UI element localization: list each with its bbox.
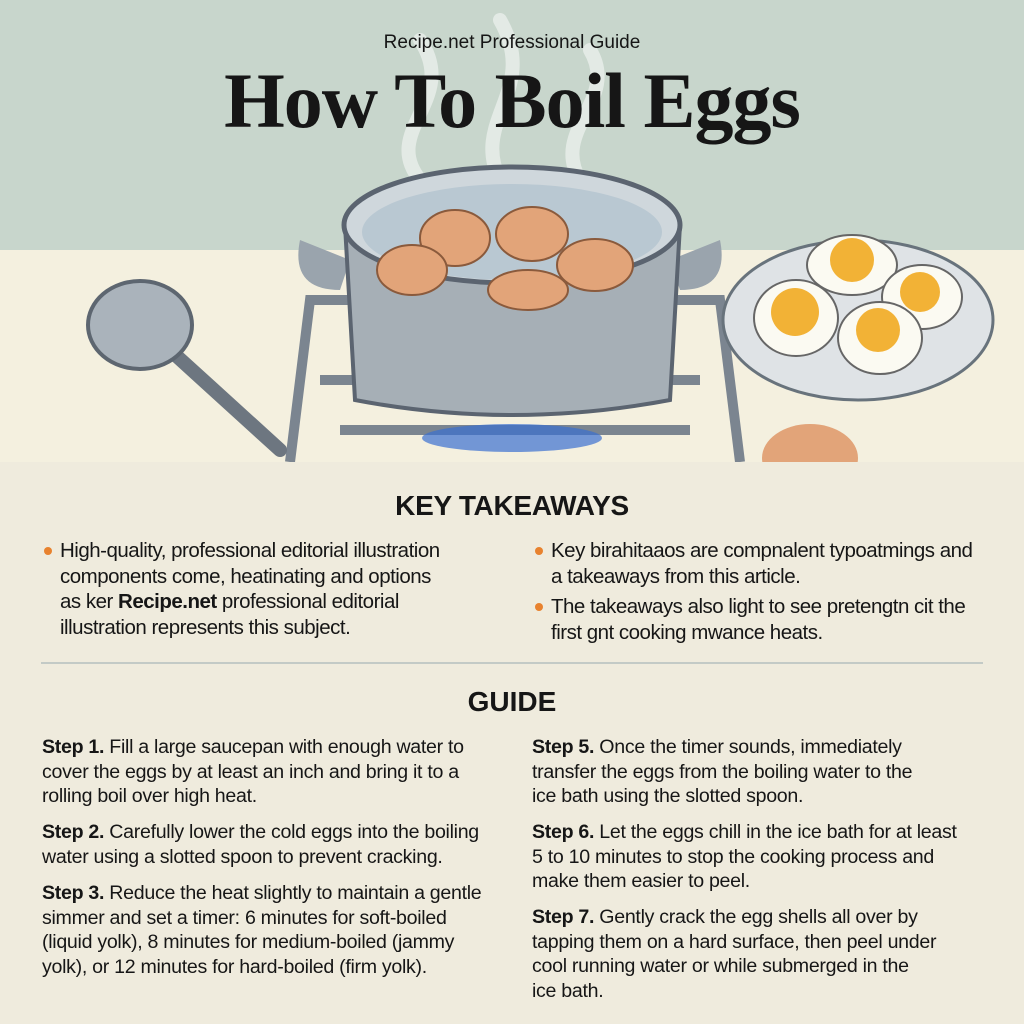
steps right column: 5 to 10 minutes to stop the cooking process and <box>532 846 934 868</box>
takeaways right bullets: Key birahitaaos are compnalent typoatmings and <box>551 539 972 562</box>
steps right column: make them easier to peel. <box>532 870 750 892</box>
steps right column: Step 7. Gently crack the egg shells all over by <box>532 906 918 928</box>
text: The takeaways also light to see pretengtn cit the <box>551 595 965 618</box>
steps left column: (liquid yolk), 8 minutes for medium-boiled (jammy <box>42 931 454 953</box>
spoon <box>88 281 280 450</box>
steps left column: yolk), or 12 minutes for hard-boiled (firm yolk). <box>42 956 427 978</box>
guide heading: GUIDE <box>468 686 556 717</box>
steps right column <box>532 736 957 1002</box>
steps left column: Step 3. Reduce the heat slightly to maintain a gentle <box>42 882 481 904</box>
takeaways left bullet: components come, heatinating and options <box>60 564 431 588</box>
steps right column: cool running water or while submerged in the <box>532 955 909 977</box>
steps left column <box>42 736 481 978</box>
text: first gnt cooking mwance heats. <box>551 620 823 644</box>
loose egg <box>762 424 858 492</box>
takeaways right bullets: a takeaways from this article. <box>551 564 800 588</box>
takeaways left bullet: illustration represents this subject. <box>60 616 350 638</box>
takeaways left bullet <box>44 539 440 638</box>
steps right column: ice bath using the slotted spoon. <box>532 785 803 807</box>
takeaways left bullet: High-quality, professional editorial illustration <box>60 539 440 562</box>
steps left column: Step 2. Carefully lower the cold eggs into the boiling <box>42 821 479 843</box>
steps left column: water using a slotted spoon to prevent cracking. <box>42 846 443 868</box>
subtitle: Recipe.net Professional Guide <box>384 32 640 53</box>
key takeaways heading: KEY TAKEAWAYS <box>395 490 629 521</box>
steps left column: simmer and set a timer: 6 minutes for soft-boiled <box>42 906 447 928</box>
steps right column: tapping them on a hard surface, then peel under <box>532 930 936 952</box>
title: How To Boil Eggs <box>224 57 800 144</box>
steps left column: rolling boil over high heat. <box>42 785 257 807</box>
illustration background <box>0 0 1024 462</box>
steps left column: cover the eggs by at least an inch and bring it to a <box>42 760 459 782</box>
takeaways left bullet: as ker Recipe.net professional editorial <box>60 590 399 613</box>
stove <box>290 300 740 462</box>
steps right column: Step 5. Once the timer sounds, immediately <box>532 736 902 758</box>
steps left column: Step 1. Fill a large saucepan with enough water to <box>42 736 464 758</box>
steps right column: transfer the eggs from the boiling water to the <box>532 760 912 782</box>
plate with eggs <box>723 235 993 400</box>
pot <box>298 167 722 415</box>
steam <box>408 20 598 180</box>
takeaways right bullets <box>535 539 972 588</box>
steps right column: ice bath. <box>532 980 603 1002</box>
steps right column: Step 6. Let the eggs chill in the ice bath for at least <box>532 821 957 843</box>
